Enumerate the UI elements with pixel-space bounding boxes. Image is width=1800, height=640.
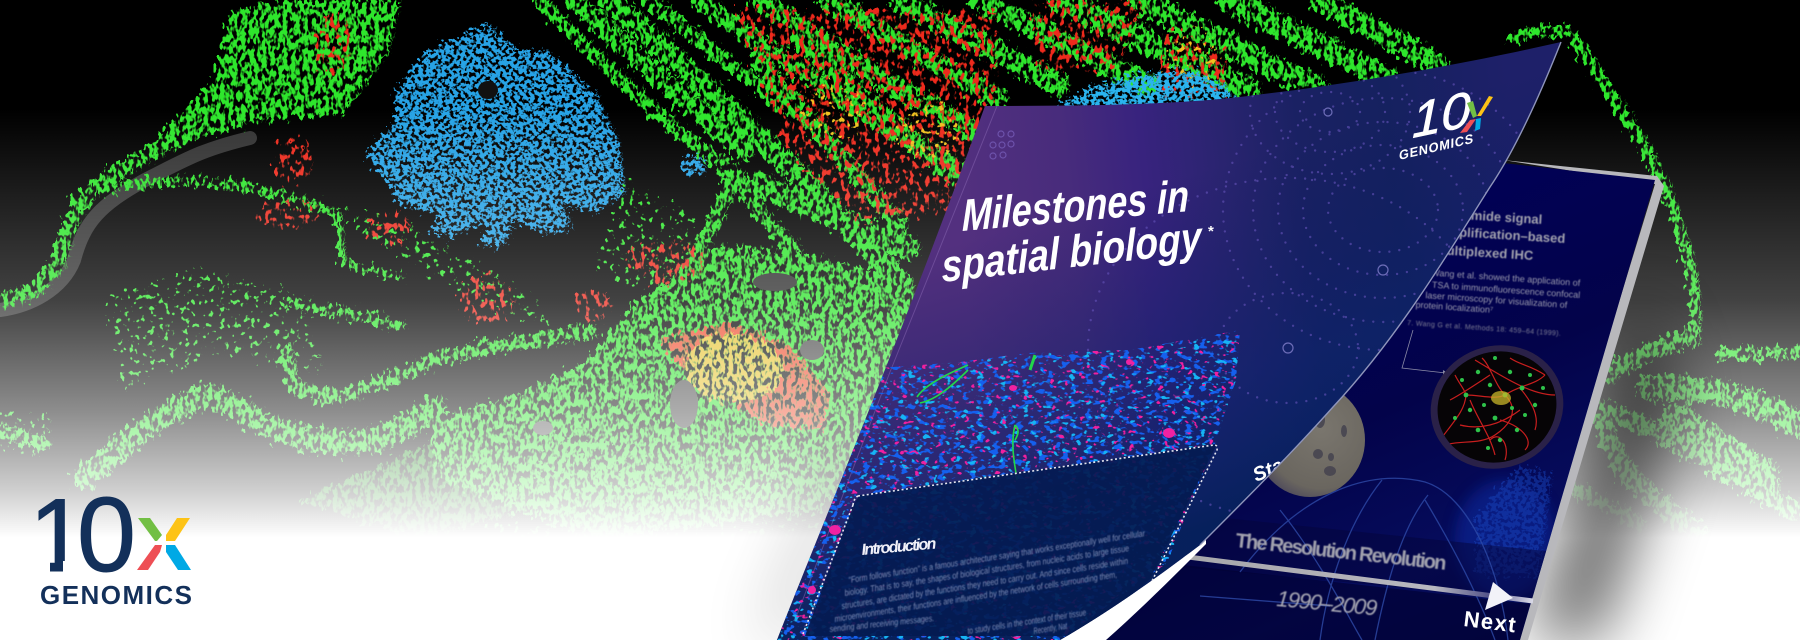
cover logo x (1460, 96, 1493, 133)
timeline bar (1180, 556, 1533, 601)
page thickness edge (1503, 160, 1664, 640)
front page of brochure (770, 30, 1570, 640)
date range: 1990–2009 (1276, 586, 1378, 621)
corner ring dots (990, 131, 1014, 159)
tissue: dark holes (478, 81, 824, 435)
left rule (795, 106, 997, 620)
introduction body text: structures, are dictated by the functions they need to carry out. And since cells reside within (841, 556, 1129, 611)
blue speckle patch (1477, 467, 1553, 575)
milestone paragraph: Wang et al. showed the application of (1431, 268, 1581, 288)
logo numerals (38, 496, 132, 572)
bright centre (1491, 391, 1511, 405)
milestone heading: multiplexed IHC (1435, 242, 1534, 263)
cover title: * (1208, 223, 1214, 240)
tissue: yellow and red patch (660, 322, 832, 430)
milestone paragraph: TSA to immunofluorescence confocal (1432, 280, 1581, 300)
introduction body text: Recently, Nat (1033, 621, 1068, 636)
dark text band (1185, 518, 1546, 598)
logo wordmark: GENOMICS (40, 580, 192, 610)
milestone paragraph: laser microscopy for visualization of (1425, 290, 1568, 310)
page drop shadow (760, 300, 1680, 640)
white underside of the curled page (1060, 540, 1206, 640)
next label: Next (1462, 606, 1518, 637)
concentric dot pattern (1086, 72, 1518, 512)
page surface (1050, 160, 1655, 640)
cover title: spatial biology (941, 211, 1204, 292)
start label: Start (1250, 449, 1301, 487)
introduction body text: “Form follows function” is a famous architecture saying that works exceptionally well for cellular (848, 528, 1146, 585)
milestone heading: amplification–based (1440, 223, 1566, 246)
section title: The Resolution Revolution (1234, 530, 1448, 575)
introduction body text (829, 528, 1146, 636)
back page artwork (1106, 396, 1556, 640)
neuron bodies (1453, 356, 1545, 450)
introduction body text: microenvironments, their functions are influenced by the network of cells surrounding them, (834, 569, 1118, 624)
page base gradient (770, 30, 1570, 640)
milestone heading (1435, 206, 1566, 263)
tissue: red signal patches (256, 0, 1230, 324)
green vessels (917, 355, 1035, 480)
grey cell disc (1268, 396, 1365, 497)
microscopy image disc (1430, 345, 1564, 469)
introduction panel (803, 444, 1217, 636)
milestone heading: Tyramide signal (1444, 206, 1543, 227)
back page of brochure (1050, 160, 1664, 640)
cover logo wordmark: GENOMICS (1399, 131, 1473, 163)
cover title (942, 180, 1214, 290)
cover title: Milestones in (962, 170, 1189, 241)
milestone reference: 7. Wang G et al. Methods 18: 459–64 (1999). (1407, 320, 1561, 338)
logo: 10x Genomics (29, 476, 192, 610)
page blue wash (777, 250, 1396, 640)
front page edge highlight (1200, 42, 1561, 545)
introduction body text: to study cells in the context of their tissue (967, 607, 1087, 636)
tissue: blue cell cluster (367, 24, 1240, 245)
cover logo (1400, 92, 1493, 160)
dark band lower (1106, 566, 1530, 640)
introduction heading: Introduction (861, 535, 937, 559)
tissue: yellow highlights (806, 32, 1228, 160)
callout connector (1402, 330, 1447, 376)
introduction body text: sending and receiving messages. (829, 613, 935, 634)
cover logo numerals: 10 (1412, 80, 1471, 149)
logo x mark (137, 518, 191, 570)
wave arcs (1200, 478, 1508, 640)
milestone paragraph (1415, 268, 1581, 315)
blue glow (1455, 480, 1555, 600)
logo numerals: 0 (77, 476, 136, 594)
milestone paragraph: protein localization⁷ (1415, 300, 1494, 315)
logo numerals: 1 (29, 478, 87, 594)
introduction body text: biology. That is to say, the shapes of biological structures, from nucleic acids to large tissue (844, 543, 1130, 598)
magenta cells (808, 359, 1175, 594)
tissue: sparse green scatter (0, 180, 900, 560)
tissue section image (770, 320, 1250, 640)
neuron branches (1440, 358, 1555, 460)
next arrow (1485, 582, 1513, 610)
pattern markers (1283, 108, 1388, 353)
tissue relief shadows (0, 138, 250, 310)
